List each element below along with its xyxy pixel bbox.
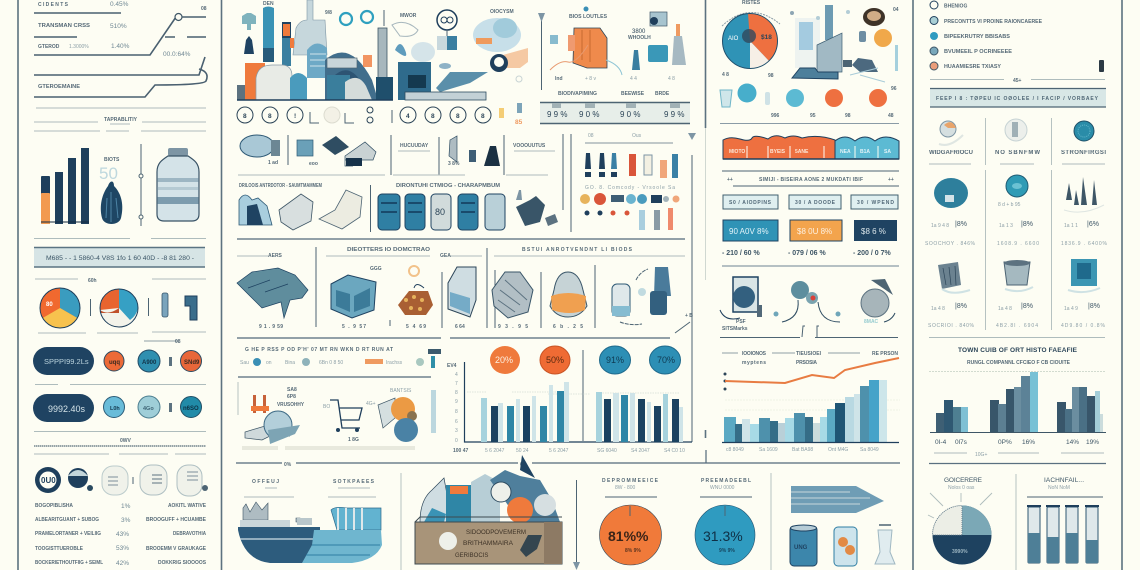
bar chart: 0P%	[998, 439, 1012, 446]
small bottle icon grid: GO. 8. Comcody - Vrsoole Sa	[585, 185, 675, 191]
bar chart: 0l7s	[955, 439, 968, 446]
axis labels: SG 6040	[597, 448, 617, 454]
stat banner: 9 0 %	[579, 110, 599, 119]
panel: lower centre legend: Bina	[285, 360, 295, 366]
pie chart: GOICERERE	[944, 477, 983, 484]
pie chart: $18	[761, 34, 772, 41]
icon: orange dome	[550, 272, 587, 317]
stacked tabs: SA	[884, 149, 891, 155]
bar chart: c8 8049	[726, 447, 744, 453]
arrow line	[573, 480, 580, 570]
percentages B: SOCRIOI . 840%	[928, 323, 975, 329]
illustration: globe and shopping cart: 6P8	[287, 394, 296, 400]
table	[35, 503, 207, 567]
percentages A: 1836.9 . 6400%	[1061, 241, 1108, 247]
table: DOKKRIG SIOOOOS	[158, 560, 207, 566]
headings and jars	[239, 183, 558, 232]
illustration: globe and shopping cart: SA8	[287, 387, 297, 393]
chart axes: 6	[455, 419, 458, 425]
stat lines with connector: 08	[201, 6, 207, 12]
table: 53%	[116, 545, 129, 552]
tag row: $8 0U 8%	[797, 227, 832, 236]
bin icons	[938, 259, 1100, 293]
tool icons row: VOOOUUTUS	[513, 143, 546, 149]
stat lines with connector: TRANSMAN CRSS	[38, 23, 91, 29]
percent circles: 8W - 800	[615, 485, 636, 491]
panel: centre bar chart	[447, 346, 692, 454]
book illustration: 4 8	[668, 76, 675, 82]
pill row 1: A900	[142, 360, 157, 366]
table: 3%	[121, 517, 131, 524]
circle icon row	[720, 84, 897, 119]
ship: SOTKPAEES	[333, 479, 375, 485]
waste box: BRITHAMMAIRA	[463, 541, 513, 547]
percentages A: |6%	[1087, 221, 1099, 228]
circle icon row: 996	[771, 113, 780, 119]
percentages A: |8%	[1021, 221, 1033, 228]
book illustration: lnd	[555, 76, 562, 82]
headings and jars: DIRONTUHI CTMIOG - CHARAPMBUM	[396, 183, 500, 189]
percent circles: 20%	[495, 355, 513, 365]
bars group 1	[481, 382, 569, 442]
panel: bottom strip: 0%	[284, 462, 292, 468]
legend: BVUMEEIL P OCRINEEEE	[944, 49, 1013, 55]
stat lines with connector: GTEROEMAINE	[38, 84, 81, 90]
panel: materials row: GEA	[440, 253, 451, 259]
icon row: 0U0	[41, 476, 56, 485]
numbered circles: 4	[406, 113, 410, 120]
legend	[930, 1, 1105, 84]
table: BROOGUFF + HCUAMBE	[146, 517, 207, 523]
circle icon row: 98	[845, 113, 851, 119]
table: BOCKERIETHOUTFIIG + SEIML	[35, 560, 103, 566]
legend: BIPEEKRUTRY BBISABS	[944, 34, 1011, 40]
icons trio: PSF	[736, 319, 746, 325]
table: ALBEARITGUANT + SUBOG	[35, 517, 99, 523]
table: 43%	[116, 531, 129, 538]
boxes row: 30 / A DOODE	[795, 200, 836, 206]
stacked tabs	[723, 136, 899, 159]
percentages B: 1a 4 8	[931, 306, 945, 312]
bar chart: 16%	[1022, 439, 1035, 446]
process illustration: OIOCYSM	[490, 9, 514, 15]
icons trio: 8MAC	[864, 319, 879, 325]
stat lines with connector	[34, 1, 207, 131]
chart axes: 0	[455, 438, 458, 444]
value labels: + B	[685, 313, 693, 319]
stacked tabs: NEA	[840, 149, 851, 155]
stat banner: BIODIVAPIMING	[558, 91, 597, 97]
illustration: globe and shopping cart: 1 8G	[348, 437, 359, 443]
percentages A: 1a 1 3	[999, 223, 1013, 229]
chart axes	[455, 362, 692, 444]
pill row 1: SPPPI99.2Ls	[44, 357, 89, 366]
banner	[34, 247, 205, 267]
percentages A: 1a 9 4 8	[931, 223, 949, 229]
book illustration: BIOS LOUTLES	[569, 14, 608, 20]
chart axes: 3	[455, 428, 458, 434]
value labels: 6 64	[455, 324, 465, 330]
pill row 2	[33, 394, 202, 422]
axis labels: 5 6 2047	[485, 448, 505, 454]
legend: 45+	[1013, 78, 1022, 84]
icon: glass	[875, 525, 895, 564]
waste box	[415, 455, 562, 564]
top icons: NO SBNFMW	[995, 150, 1040, 156]
small bottle icon grid: 08	[588, 133, 594, 139]
stacked tabs: 5ANE	[795, 149, 809, 155]
percentages B	[928, 303, 1106, 329]
book illustration: 3800	[632, 29, 646, 35]
table: TOOGISTTUEROBLE	[35, 546, 84, 552]
value labels: 5 . 9 57	[342, 324, 366, 330]
pie chart	[722, 0, 780, 79]
book illustration: + 8 v	[585, 76, 596, 82]
percentages A: 1608.9 . 6600	[997, 241, 1039, 247]
numbered circles: !	[294, 113, 296, 120]
numbered circles: 8	[431, 113, 435, 120]
value labels: 9 3 . 9 5	[498, 324, 528, 330]
panel: materials row: AERS	[268, 253, 283, 259]
small bottle icon grid	[563, 133, 696, 442]
ship: OFFEUJ	[252, 479, 279, 485]
big arrow	[791, 486, 884, 513]
axis labels: 5 6 2047	[549, 448, 569, 454]
chart axes: 8	[455, 390, 458, 396]
factory illustration: 9/8	[325, 10, 332, 16]
icons trio	[720, 277, 895, 332]
percentages A	[925, 221, 1108, 247]
stat banner: 9 0 %	[620, 110, 640, 119]
percentages B: 4D9.80 / 0.8%	[1061, 323, 1106, 329]
small bottle icon grid: Ous	[632, 133, 642, 139]
percentages B: |8%	[1088, 303, 1100, 310]
headings and jars: 80	[435, 207, 445, 217]
middle icons	[934, 175, 1104, 212]
percentages B: 1a 4 8	[998, 306, 1012, 312]
circle icon row: 48	[888, 113, 894, 119]
numbered circles: 8	[243, 113, 247, 120]
percent circles: 91%	[606, 355, 624, 365]
bar chart: Ont M4G	[828, 447, 848, 453]
building illustration: 04	[893, 7, 899, 13]
percentages A: SOOCHOY . 846%	[925, 241, 976, 247]
pie chart: AIO	[728, 36, 739, 42]
circle icon row: 96	[891, 86, 897, 92]
middle icons: 8 d + b 95	[998, 202, 1021, 208]
axis labels: S4 2047	[631, 448, 650, 454]
illustration: globe and shopping cart: VRUSOHHY	[277, 402, 305, 408]
panel: lower centre legend: Sau	[240, 360, 249, 366]
percentages B: 1a 4 9	[1064, 306, 1078, 312]
percent circles: 70%	[657, 355, 675, 365]
chart heading	[958, 347, 1078, 366]
bar chart: 19%	[1086, 439, 1099, 446]
bar chart: 14%	[1066, 439, 1079, 446]
bar chart	[930, 372, 1106, 458]
pie chart	[928, 474, 1016, 570]
icon: jar	[834, 527, 857, 566]
stat banner: 9 9 %	[547, 110, 567, 119]
boxes row: S0 / AIODPINS	[729, 200, 772, 206]
panel: lower centre legend: 6Bn 0 8 50	[319, 360, 343, 366]
percent circles: WNU 0000	[710, 485, 735, 491]
value labels	[259, 313, 693, 333]
chart axes: 9	[455, 399, 458, 405]
panel: bottom strip: 6G	[520, 462, 527, 468]
bar chart: 0I-4	[935, 439, 947, 446]
stat lines with connector: TAPRABLITIY	[104, 117, 138, 123]
icons trio: SITSMarks	[722, 326, 748, 332]
tag row	[723, 220, 897, 241]
percent circles: DEPROMMEEICE	[602, 478, 659, 484]
percent circles	[490, 346, 680, 374]
stat lines with connector: GTEROD	[38, 44, 60, 50]
top icons: STRONFIRGSI	[1061, 150, 1106, 156]
stat lines with connector: 1.40%	[111, 43, 130, 50]
pill row 1: uqq	[109, 360, 120, 366]
chart heading: RUNGL COMPANNL CFCIEO F CB CIOUITE	[967, 360, 1071, 366]
percent circles	[600, 478, 755, 565]
icon: carton	[448, 267, 476, 317]
value row: - 079 / 06 %	[788, 250, 827, 257]
panel: bottom strip	[236, 450, 900, 570]
table: DEBRAVOTHIA	[173, 531, 206, 537]
rule	[242, 446, 415, 450]
icon: rock	[492, 272, 533, 318]
bar chart with orange bar	[41, 148, 89, 224]
chart axes: 7	[455, 381, 458, 387]
waste box: GERIBOCIS	[455, 553, 488, 559]
tag row: $8 6 %	[861, 227, 886, 236]
pill row 1: SNd9	[184, 360, 200, 366]
axis labels: 100 47	[453, 448, 469, 454]
illustration: globe and shopping cart: BO	[323, 404, 330, 410]
pill row 2: L0h	[110, 406, 120, 412]
bottle bars: NoN NoM	[1048, 485, 1070, 491]
stacked tabs: BYEIS	[770, 149, 786, 155]
boxes row: 30 / WPEND	[857, 200, 894, 206]
stacked tabs: MIOTO	[729, 149, 745, 155]
banner	[930, 88, 1106, 107]
pie chart: RISTES	[742, 0, 761, 6]
factory illustration: DEN	[263, 1, 274, 7]
tool icons row: 1 ad	[268, 160, 278, 166]
value row: - 200 / 0 7%	[853, 250, 892, 257]
tool icons row: 3 8%	[448, 161, 460, 167]
panel: lower centre legend	[238, 347, 441, 450]
percent circles: 9% 9%	[719, 548, 735, 554]
value row: - 210 / 60 %	[722, 250, 761, 257]
line chart: IOOIONOS	[742, 351, 767, 357]
panel: lower centre legend: on	[266, 360, 272, 366]
value row	[722, 250, 892, 257]
icon: can: UNG	[794, 545, 808, 551]
bar chart: Bat BA98	[792, 447, 813, 453]
line chart: PRSOSIA	[796, 360, 817, 366]
factory illustration	[237, 0, 393, 100]
table: BROOEMM V GRAUKAGE	[146, 546, 207, 552]
icon row	[35, 465, 208, 496]
subheading: SIMIJI - BISEIRA AONE 2 MUKDATI IBIF	[759, 177, 863, 183]
tool icons row	[238, 135, 555, 175]
panel: lower centre legend: Irachss	[386, 360, 403, 366]
percent circles: PREEMADEEBL	[701, 478, 751, 484]
value labels: 6 b . 2 5	[553, 324, 583, 330]
illustration: globe and shopping cart: 4G+	[366, 401, 376, 407]
icon: rubble	[237, 268, 308, 318]
line chart: TIEUSIOEI	[796, 351, 822, 357]
bar chart	[722, 380, 899, 453]
chart axes: 8	[455, 409, 458, 415]
value labels: 9 1 . 9 59	[259, 324, 283, 330]
circle icon row: 95	[810, 113, 816, 119]
percent circles: 8% 9%	[625, 548, 641, 554]
numbered circles: 85	[515, 119, 523, 126]
panel: right-centre column	[720, 0, 900, 453]
pie chart: 98	[768, 73, 774, 79]
chart axes: 4	[455, 372, 458, 378]
pill row 2: 9992.40s	[48, 404, 86, 414]
icon: nugget bag	[370, 266, 433, 315]
book illustration	[538, 6, 686, 90]
icon: box	[331, 275, 376, 318]
panel: centre top illustrations	[237, 0, 696, 442]
pie chart: 4 8	[722, 72, 729, 78]
numbered circles: 8	[268, 113, 272, 120]
stacked tabs: B1A	[860, 149, 870, 155]
tag row: 90 A0V 8%	[729, 227, 769, 236]
stat banner: BRDE	[655, 91, 670, 97]
table: BOGOPIBLISHA	[35, 503, 73, 509]
numbered circles	[237, 103, 523, 126]
panel: centre bar chart: EV4	[447, 363, 457, 369]
axis labels: S4 C0 10	[664, 448, 685, 454]
stat banner	[540, 91, 690, 124]
panel: materials row	[237, 247, 693, 338]
stat lines with connector: CIDENTS	[38, 2, 69, 8]
headings and jars: DRILOOIS ANTRDOTOR - SAUMTMAMMEM	[239, 183, 322, 189]
pie charts: 80	[46, 302, 53, 308]
stat lines with connector: 0.45%	[110, 1, 129, 8]
slider	[139, 144, 143, 226]
table: AOKITL WATIVE	[168, 503, 207, 509]
divider heading: 0WV	[120, 438, 132, 444]
top icons: WIDGAFRIOCU	[929, 150, 973, 156]
illustration: globe and shopping cart: BANTSIS	[390, 388, 412, 394]
bottle bars	[1027, 477, 1103, 563]
building illustration	[790, 5, 899, 82]
process illustration: MWOR	[400, 13, 417, 19]
icon: large bottle	[157, 148, 199, 221]
pill row 2: n6SO	[183, 406, 199, 412]
banner: M685 - - 1 5860-4 V8S 1fo 1 60 40D - -8 81 280 -	[46, 255, 194, 262]
stat banner: BEEWISE	[621, 91, 645, 97]
line chart: myptens	[742, 360, 766, 366]
table: PRAMELORTANER + VEILIIG	[35, 531, 101, 537]
ship	[238, 479, 382, 563]
icon: equipment	[612, 267, 671, 325]
percent circles: 50%	[546, 355, 564, 365]
stat banner: 9 9 %	[664, 110, 684, 119]
top icons	[929, 119, 1106, 156]
panel: materials row: BSTUI ANROTVENDNT LI BIODS	[522, 247, 633, 253]
table: 1%	[121, 503, 131, 510]
percentages B: 4B2.8I . 6904	[996, 323, 1038, 329]
tool icons row: HUCUUDAY	[400, 143, 429, 149]
pill row 1	[33, 347, 202, 375]
big number and bag	[99, 157, 122, 224]
bars group 2	[596, 392, 683, 442]
pie chart: 3990%	[952, 549, 968, 555]
panel: left column: 60h	[88, 278, 97, 284]
percent circles: 31.3%	[703, 528, 743, 544]
book illustration: 4 4	[630, 76, 637, 82]
stat lines with connector: 00.0:64%	[163, 51, 191, 58]
axis labels: 50 24	[516, 448, 529, 454]
process illustration	[392, 9, 528, 100]
icon: can	[790, 525, 817, 566]
book illustration: WHOOLH	[628, 35, 651, 41]
subheading	[722, 171, 899, 186]
line chart	[720, 326, 900, 410]
percentages B: |8%	[1021, 303, 1033, 310]
pill row 2: 4Go	[143, 406, 154, 412]
numbered circles: 8	[481, 113, 485, 120]
stat lines with connector: 1.3000%	[69, 44, 89, 50]
line chart: RE PRSON	[872, 351, 898, 357]
axis labels	[453, 448, 685, 454]
table: 42%	[116, 560, 129, 567]
icon: nugget bag: GGG	[370, 266, 382, 272]
numbered circles: 8	[456, 113, 460, 120]
tool icons row: eoo	[309, 161, 318, 167]
subheading: ++	[727, 177, 733, 183]
subheading: ++	[888, 177, 894, 183]
panel: far right column	[925, 1, 1108, 570]
bar chart: 10G+	[975, 452, 987, 458]
panel: left column	[33, 1, 208, 567]
legend: BHENIOG	[944, 4, 967, 10]
percentages B: |8%	[955, 303, 967, 310]
panel: lower centre legend: G HE P RSS P OD P'H' 07 MT RN WKN D RT RUN AT	[245, 347, 393, 353]
percentages A: 1a 1 1	[1064, 223, 1078, 229]
legend: PRECONTTS VI PROINE RAIONCAEREE	[944, 19, 1043, 25]
bar chart: Sa 1609	[759, 447, 778, 453]
stat lines with connector: 510%	[110, 23, 127, 30]
pie charts: 08	[175, 339, 181, 345]
value labels: 5 4 69	[406, 324, 426, 330]
percentages A: |8%	[955, 221, 967, 228]
banner: FEEP I 8 : TØPEU IC OØOLEE / I FACIP / VORBAEY	[936, 96, 1099, 102]
big number and bag: BIOTS	[104, 157, 120, 163]
percent circles: 81%%	[608, 528, 649, 544]
pie charts	[38, 288, 206, 345]
bottle bars: IACHNFAIL...	[1044, 477, 1084, 484]
waste box: SIDOODPOVEMERM	[466, 530, 526, 536]
illustration: globe and shopping cart	[245, 387, 436, 444]
three column grid lines	[929, 118, 1105, 330]
bar chart: Sa 8049	[860, 447, 879, 453]
legend: HUAAMIESRE TXIASY	[944, 64, 1002, 70]
pie chart: Nolos 0 oas	[948, 485, 975, 491]
boxes row	[723, 195, 898, 209]
big number and bag: 50	[99, 164, 118, 183]
panel: materials row: DIEOTTERS IO DOMCTRAO	[347, 247, 430, 253]
chart heading: TOWN CUIB OF ORT HISTO FAEAFIE	[958, 347, 1078, 354]
